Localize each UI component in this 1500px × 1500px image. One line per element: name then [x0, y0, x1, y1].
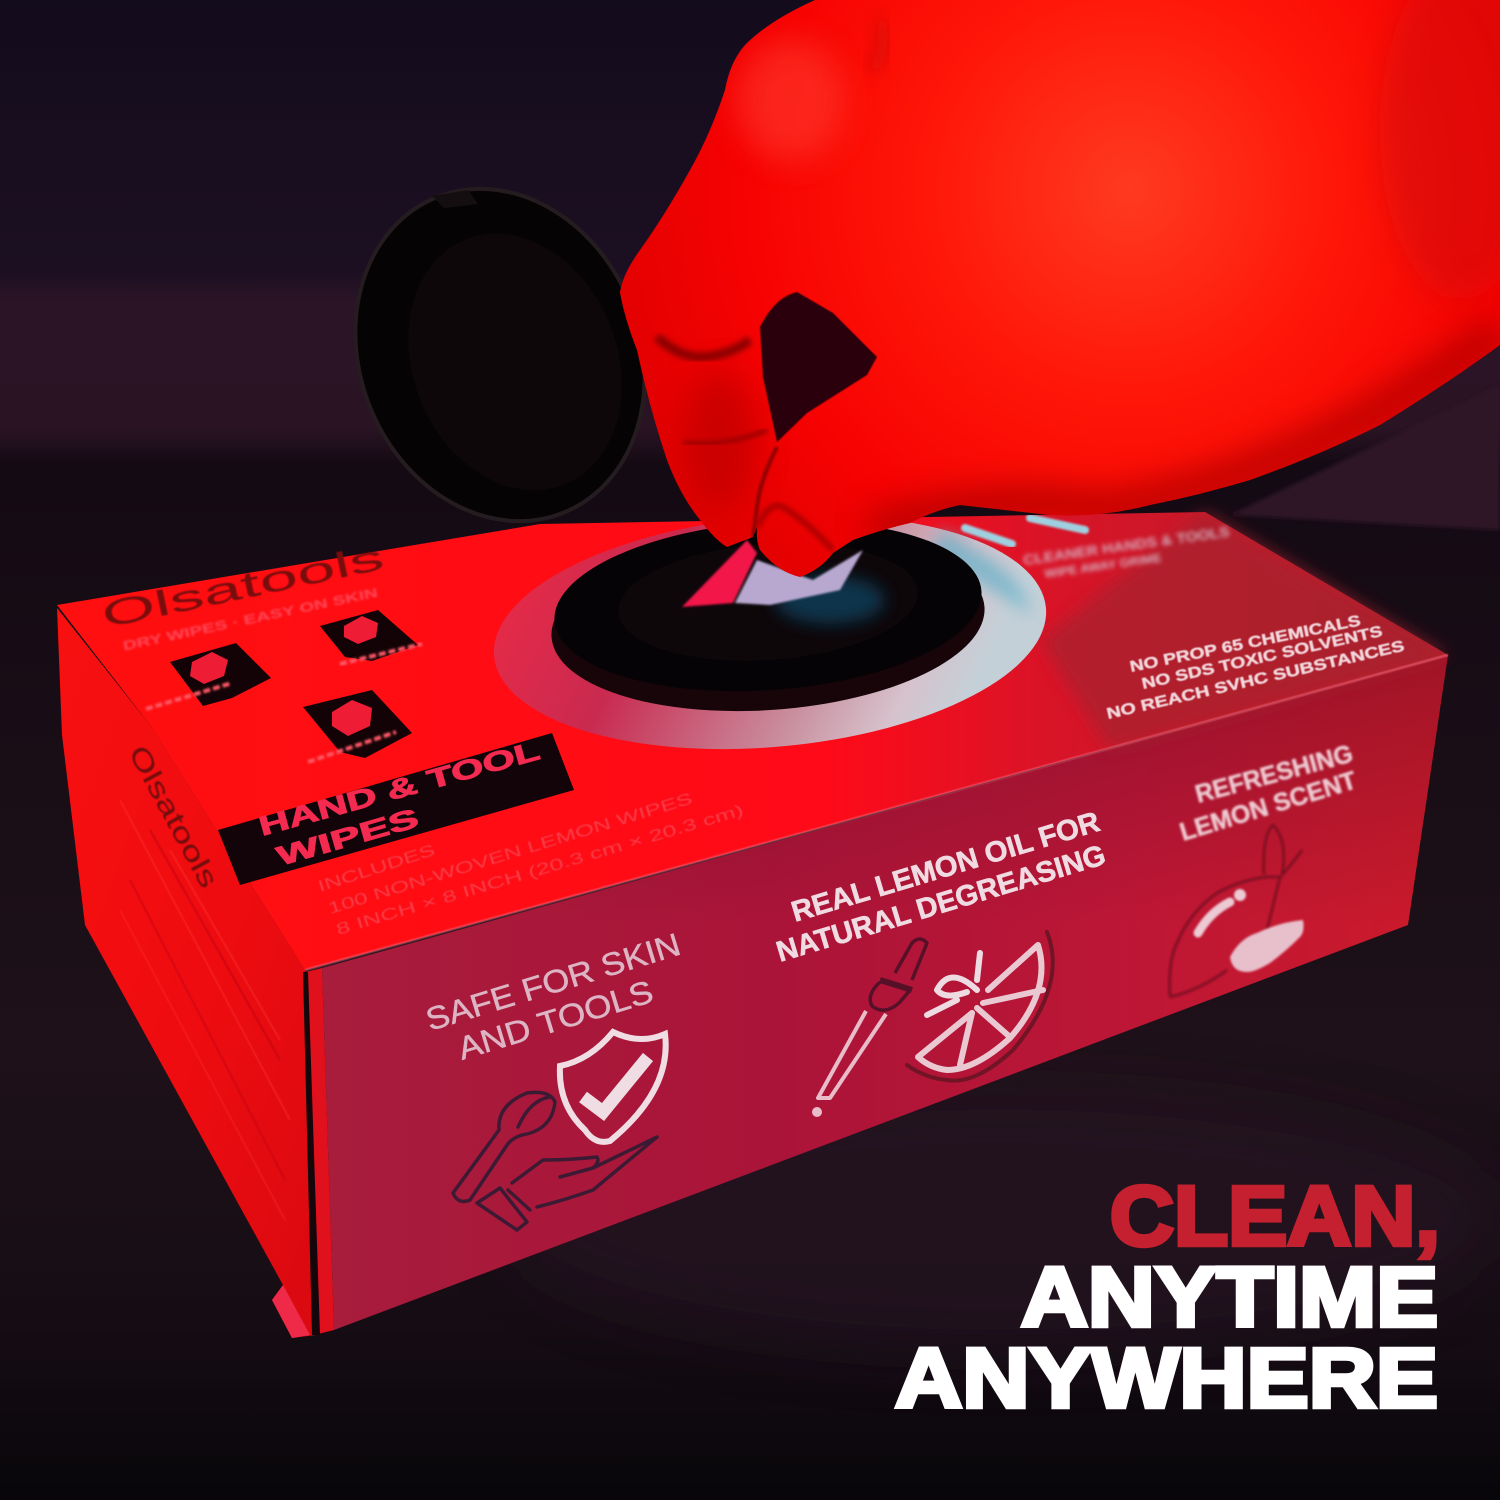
hand shading: [657, 0, 1500, 550]
headline: CLEAN,: [1110, 1169, 1440, 1263]
contents text: INCLUDES: [316, 842, 437, 896]
front flap red strip: [306, 968, 334, 1334]
icon: dropper: [812, 939, 927, 1117]
feature: refreshing lemon scent: LEMON SCENT: [1177, 766, 1360, 847]
front face top shading: [322, 655, 1448, 1330]
badge two: [320, 610, 422, 664]
top right print: small claim: [1022, 523, 1230, 581]
product: wipes box: [57, 145, 1448, 1338]
feature: refreshing lemon scent: REFRESHING: [1192, 740, 1356, 809]
headline: [895, 1169, 1440, 1425]
feature: safe for skin and tools: [422, 926, 685, 1230]
top right print: small claim: WIPE AWAY GRIME: [1043, 551, 1162, 581]
icon: hand holding wrench: [453, 1092, 657, 1230]
headline: ANYWHERE: [895, 1331, 1438, 1425]
black label: hand and tool wipes: WIPES: [273, 803, 422, 872]
black label: hand and tool wipes: [218, 733, 574, 885]
side print: brand: Olsatools: [123, 740, 225, 893]
open lid: [307, 145, 693, 565]
feature: safe for skin and tools: AND TOOLS: [454, 973, 657, 1067]
chemical free claims: NO SDS TOXIC SOLVENTS: [1140, 623, 1384, 693]
badge three: [303, 690, 412, 762]
feature: real lemon oil: NATURAL DEGREASING: [773, 839, 1109, 969]
box front face: [322, 655, 1448, 1330]
gap between fingers: [760, 292, 877, 442]
icon: lemon slice: [907, 932, 1053, 1081]
dispenser opening: [545, 507, 991, 725]
side panel fold lines: [120, 800, 290, 1220]
chemical free claims: NO PROP 65 CHEMICALS: [1128, 612, 1362, 676]
ring blue reflection: [930, 530, 1030, 615]
dispenser ring: [484, 493, 1056, 771]
feature: real lemon oil: REAL LEMON OIL FOR: [788, 806, 1104, 929]
hand reaching into box: [620, 0, 1500, 577]
box left side panel: [57, 608, 316, 1338]
icon: whole lemon: [1170, 825, 1302, 997]
box top face: [57, 512, 1448, 970]
contents text: 8 INCH × 8 INCH (20.3 cm × 20.3 cm): [334, 802, 746, 939]
shaded right of top face: [1040, 512, 1448, 750]
feature: real lemon oil: [773, 806, 1109, 1117]
icon: shield with check: [560, 1032, 666, 1142]
box corner seam: [303, 972, 320, 1335]
wipe pulled from opening: [682, 540, 863, 607]
contents text: [316, 790, 746, 939]
badge one: [146, 643, 271, 709]
top right icon fragment: [965, 518, 1085, 544]
black label: hand and tool wipes: HAND & TOOL: [256, 735, 543, 842]
box top edge highlight: [305, 655, 1448, 970]
feature: safe for skin and tools: SAFE FOR SKIN: [422, 926, 685, 1038]
icon: lemon highlight and wedge: [1198, 889, 1304, 972]
feature: refreshing lemon scent: [1170, 740, 1360, 997]
top right print: small claim: CLEANER HANDS & TOOLS: [1022, 523, 1230, 568]
top print: brand: DRY WIPES · EASY ON SKIN: [122, 585, 379, 653]
headline: ANYTIME: [1021, 1250, 1438, 1344]
chemical free claims: [1105, 612, 1406, 723]
contents text: 100 NON-WOVEN LEMON WIPES: [326, 790, 695, 918]
chemical free claims: NO REACH SVHC SUBSTANCES: [1105, 638, 1406, 723]
top print: brand: [98, 536, 392, 656]
top print: brand: Olsatools: [98, 536, 387, 636]
box corner flap: [272, 1285, 310, 1338]
